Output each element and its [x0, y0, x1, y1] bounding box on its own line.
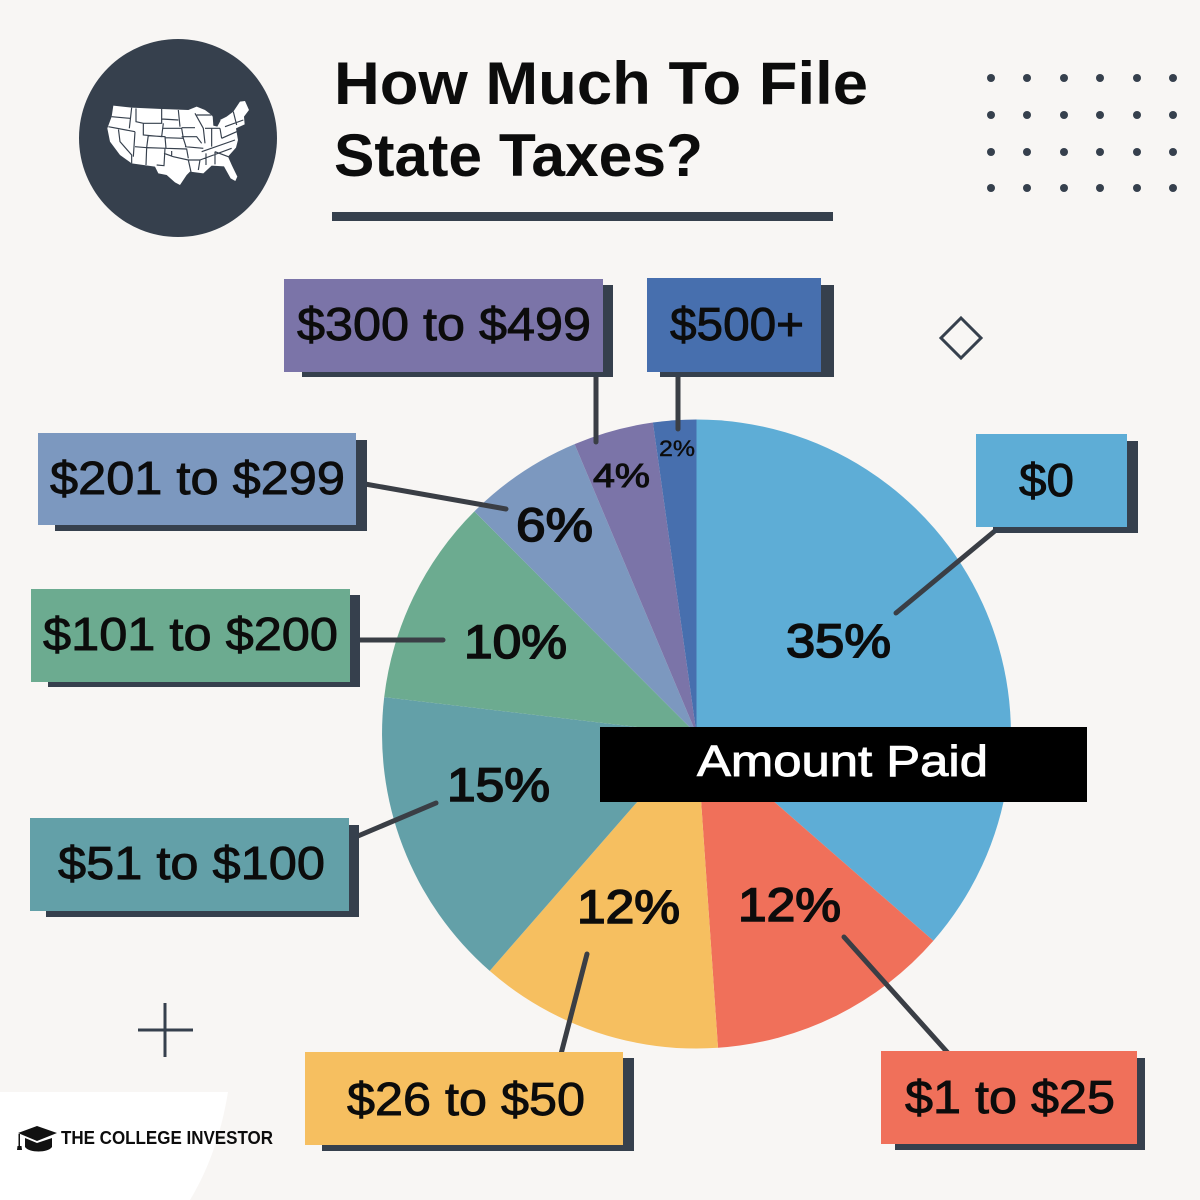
lake gap	[213, 116, 221, 127]
percent labels: 6%	[516, 498, 593, 551]
label: $51 to $100	[30, 818, 359, 917]
decorative dot grid	[987, 74, 1177, 192]
label: $26 to $50	[305, 1052, 634, 1151]
percent labels: 2%	[659, 436, 695, 461]
title underline	[332, 212, 833, 221]
amount paid banner	[600, 727, 1087, 802]
label: $101 to $200	[31, 589, 360, 687]
percent labels: 10%	[464, 615, 567, 668]
label: $300 to $499	[284, 279, 613, 377]
logo: The College Investor	[0, 1092, 273, 1200]
percent labels: 15%	[447, 758, 550, 811]
logo: The College Investor: THE COLLEGE INVESTOR	[61, 1128, 273, 1148]
label: $26 to $50: $26 to $50	[347, 1073, 585, 1125]
label: $0	[976, 434, 1138, 533]
label: $300 to $499: $300 to $499	[297, 298, 591, 350]
title	[334, 50, 868, 189]
percent labels	[447, 436, 891, 933]
label: $101 to $200: $101 to $200	[43, 608, 338, 660]
label: $201 to $299: $201 to $299	[50, 452, 345, 504]
label: $1 to $25	[881, 1051, 1145, 1150]
percent labels: 35%	[786, 614, 891, 667]
title: State Taxes?	[334, 122, 703, 189]
label: $201 to $299	[38, 433, 367, 531]
label: $1 to $25: $1 to $25	[905, 1071, 1115, 1123]
label: $500+	[647, 278, 834, 377]
title: How Much To File	[334, 50, 868, 117]
label: $51 to $100: $51 to $100	[58, 837, 325, 889]
label: $0: $0	[1019, 454, 1074, 506]
amount paid banner: Amount Paid	[697, 737, 988, 786]
pie chart	[382, 419, 1011, 1049]
label: $500+: $500+	[670, 298, 804, 350]
decorative diamond	[941, 318, 981, 358]
percent labels: 4%	[593, 457, 650, 494]
decorative plus	[138, 1003, 193, 1057]
percent labels: 12%	[577, 880, 680, 933]
icon: US map badge	[79, 39, 277, 237]
percent labels: 12%	[738, 878, 841, 931]
leader lines	[358, 375, 996, 1054]
